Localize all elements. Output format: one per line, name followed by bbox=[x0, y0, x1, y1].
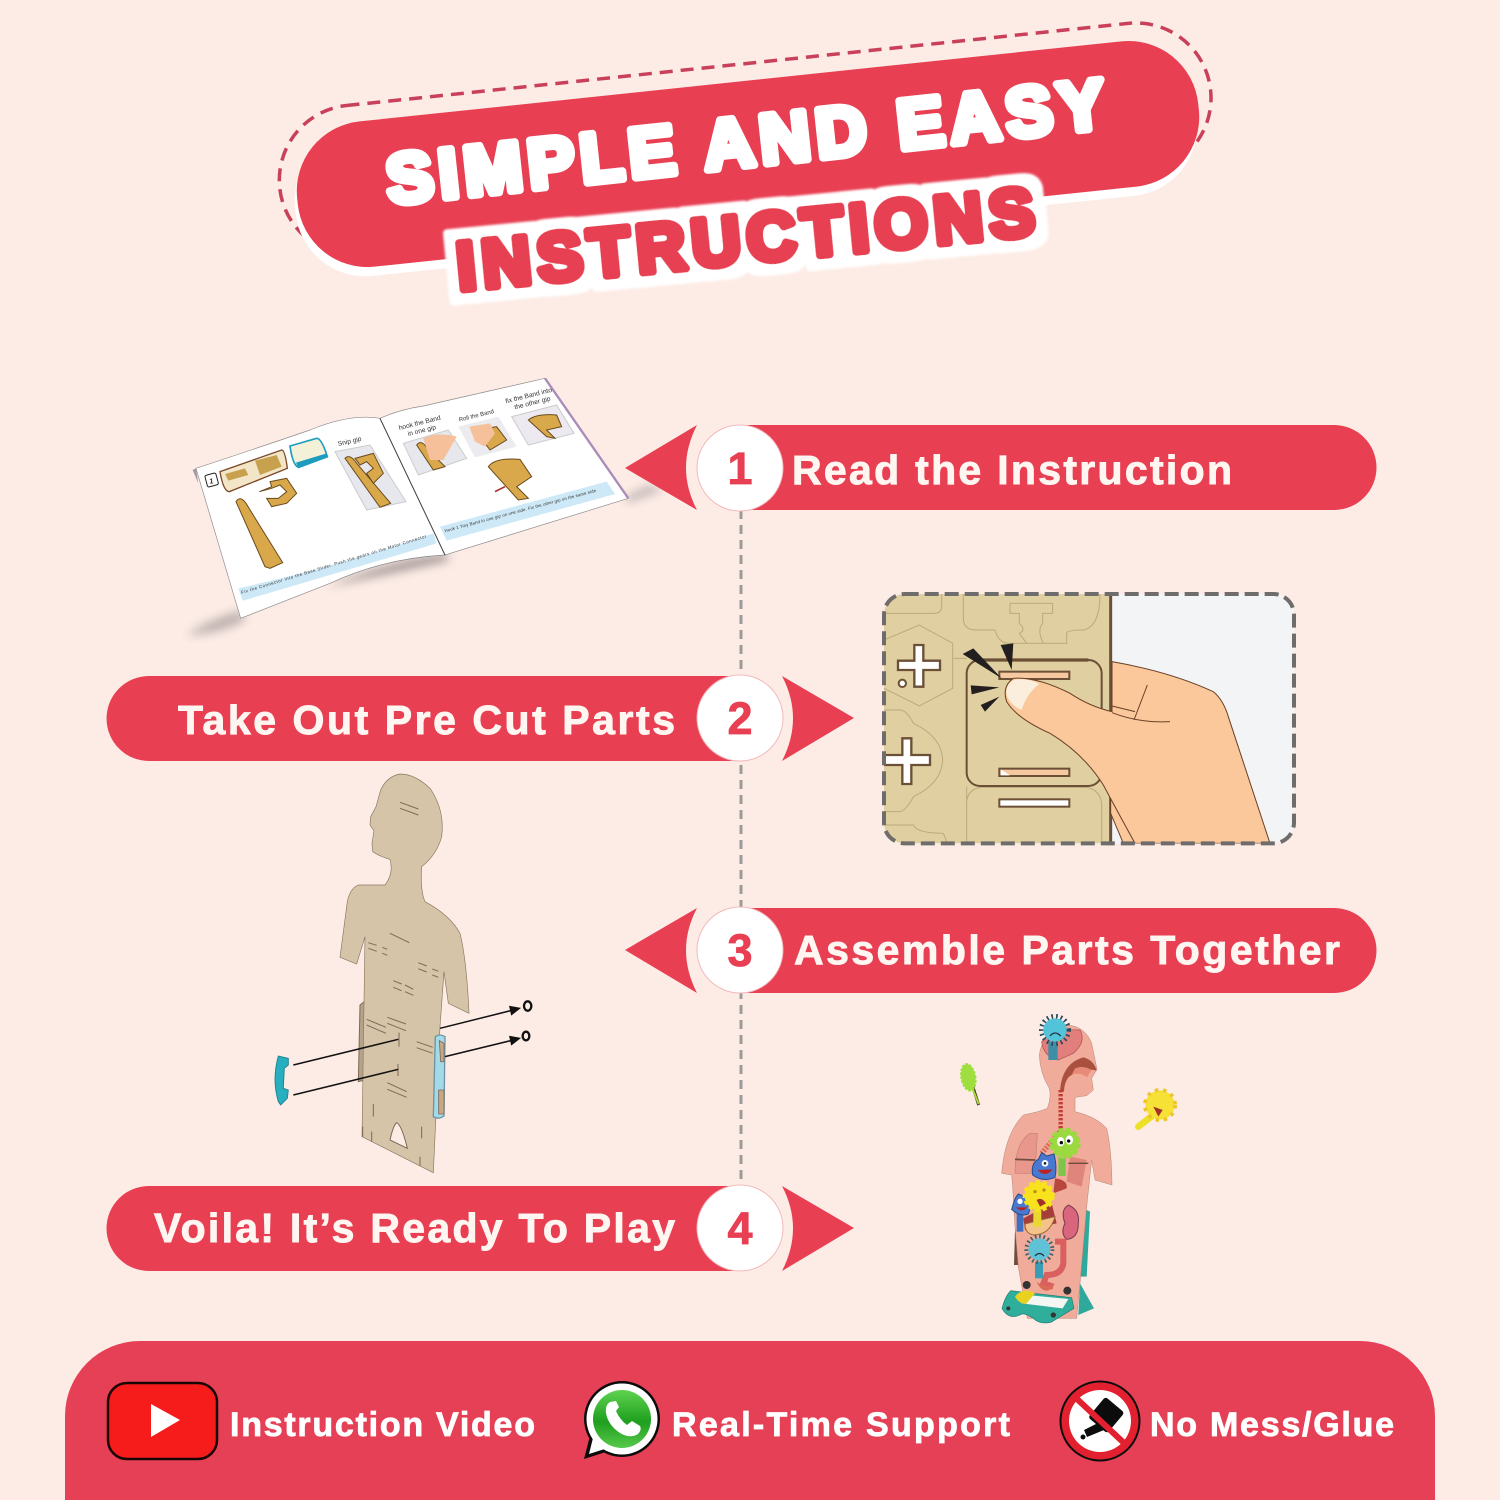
illustration: body board assembly bbox=[275, 774, 531, 1173]
step 1 label: Read the Instruction bbox=[792, 447, 1232, 493]
book captions: Snip gip bbox=[337, 436, 363, 448]
blue caption bands bbox=[238, 533, 437, 601]
dashed timeline bbox=[740, 510, 742, 1186]
die-cut outlines bbox=[884, 594, 1102, 843]
dashed frame bbox=[884, 594, 1294, 843]
title line 2: INSTRUCTIONS bbox=[453, 174, 1038, 305]
left page bbox=[193, 468, 198, 483]
title line 1: SIMPLE AND EASY bbox=[382, 65, 1109, 219]
gray panels bbox=[335, 445, 406, 510]
teal base bbox=[1002, 1291, 1074, 1323]
rubber rings bbox=[524, 1001, 531, 1011]
lungs bbox=[1015, 1133, 1037, 1173]
icon: video play bbox=[108, 1383, 217, 1459]
lower finger bbox=[1111, 793, 1137, 843]
step 2 label: Take Out Pre Cut Parts bbox=[178, 697, 675, 743]
step 4 banner bbox=[107, 1185, 854, 1271]
icon: no glue bbox=[1060, 1380, 1140, 1462]
step 2 number circle: 2 bbox=[727, 693, 753, 744]
illustration: open instruction book: the other gip bbox=[514, 395, 552, 411]
step 3 number circle: 3 bbox=[727, 925, 753, 976]
body silhouette bbox=[340, 774, 469, 1173]
yellow germ bbox=[1025, 1182, 1053, 1210]
floating green germ bbox=[959, 1063, 979, 1105]
spine edge bbox=[1109, 596, 1112, 842]
step 4 bar bbox=[107, 1186, 735, 1271]
foot notch bbox=[390, 1123, 407, 1148]
step 3 bar bbox=[745, 908, 1377, 993]
step 3 number circle bbox=[697, 907, 783, 993]
green germ bbox=[1052, 1130, 1078, 1157]
floating yellow germ bbox=[1138, 1090, 1175, 1127]
illustration: open instruction book: Roll the Band bbox=[458, 409, 495, 424]
banner white backing bbox=[288, 43, 1204, 283]
wooden tile bbox=[967, 660, 1102, 786]
no mess glue label: No Mess/Glue bbox=[1150, 1406, 1394, 1444]
illustration: open instruction book bbox=[187, 378, 663, 635]
trachea bbox=[1054, 1090, 1067, 1133]
impact marks bbox=[963, 643, 1013, 712]
panel: footer bbox=[65, 1341, 1435, 1500]
cross holes bbox=[898, 645, 940, 687]
liver and stomach bbox=[1053, 1178, 1067, 1193]
step 4 arrow bbox=[782, 1186, 854, 1271]
banner dashed outline bbox=[272, 16, 1218, 263]
illustration: open instruction book: in one gip bbox=[407, 424, 437, 438]
icon: chat phone support bbox=[584, 1381, 660, 1459]
step 3 label: Assemble Parts Together bbox=[794, 927, 1340, 973]
step 1 banner bbox=[625, 425, 1377, 511]
step 1 bar bbox=[745, 425, 1377, 510]
assembly arrows bbox=[293, 1007, 519, 1095]
step 4 number circle bbox=[697, 1185, 783, 1271]
hand in book bbox=[423, 435, 457, 460]
instruction video label: Instruction Video bbox=[230, 1406, 535, 1444]
parts cards bbox=[220, 450, 287, 492]
step 4 number circle: 4 bbox=[727, 1203, 753, 1254]
footer background bbox=[65, 1341, 1435, 1500]
thumbnail bbox=[1006, 679, 1039, 710]
blue germ brain bbox=[1041, 1016, 1069, 1044]
blue monster one bbox=[1032, 1153, 1056, 1180]
illustration: open instruction book: fix the Band into bbox=[505, 387, 553, 405]
germ sticks bbox=[1048, 1042, 1058, 1060]
step 2 banner bbox=[107, 675, 854, 761]
hand bbox=[1005, 662, 1270, 843]
kidney bbox=[1063, 1205, 1079, 1239]
airway bbox=[1060, 1057, 1097, 1092]
blue side plate bbox=[433, 1035, 445, 1118]
step 4 label: Voila! It’s Ready To Play bbox=[154, 1205, 675, 1251]
illustration: open instruction book: 1 bbox=[209, 476, 213, 485]
real-time support label: Real-Time Support bbox=[672, 1406, 1010, 1444]
teal clip bbox=[275, 1056, 288, 1105]
gold parts bbox=[236, 415, 562, 568]
step 2 bar bbox=[107, 676, 735, 761]
back plate bbox=[358, 1001, 365, 1082]
step 2 number circle bbox=[697, 675, 783, 761]
back supports bbox=[1014, 1230, 1020, 1265]
illustration: hand popping out a part bbox=[884, 594, 1294, 843]
step 3 banner bbox=[625, 907, 1377, 993]
title banner bbox=[272, 16, 1218, 305]
right page bbox=[380, 378, 628, 555]
blue monster two bbox=[1012, 1194, 1031, 1215]
illustration: open instruction book: Hook 1 Tiny Band in one gip on one side. Fix the other gip on the same side bbox=[444, 488, 597, 533]
illustration: open instruction book: Fix the Connector into the Base Slider. Push the gears on the Motor Connector bbox=[240, 533, 427, 595]
pink body bbox=[1002, 1025, 1112, 1318]
intestines bbox=[1043, 1242, 1063, 1287]
banner red pill bbox=[290, 34, 1206, 274]
step number box bbox=[205, 473, 219, 487]
slots bbox=[363, 802, 438, 1166]
blue germ gut bbox=[1026, 1236, 1052, 1262]
illustration: finished body model with germs bbox=[959, 1016, 1175, 1323]
step 1 number circle: 1 bbox=[727, 443, 753, 494]
illustration: open instruction book: hook the Band bbox=[398, 415, 442, 432]
brain bbox=[1042, 1030, 1082, 1060]
step 2 arrow bbox=[782, 676, 854, 761]
step 3 arrow bbox=[625, 908, 697, 993]
step 1 number circle bbox=[697, 425, 783, 511]
step 1 arrow bbox=[625, 425, 697, 510]
